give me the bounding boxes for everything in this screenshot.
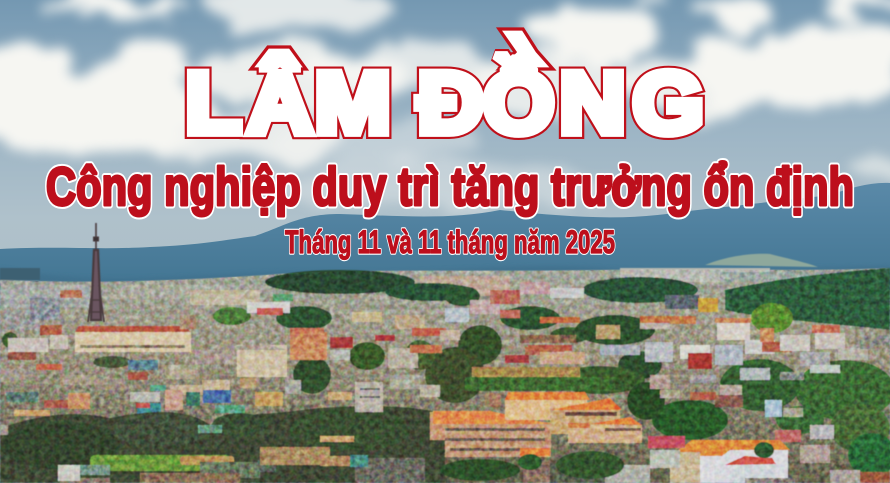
- sky: [0, 0, 890, 290]
- title: LÂM ĐỒNG: LÂMĐỒNG: [185, 54, 704, 151]
- city: [0, 268, 890, 483]
- mountains: [0, 183, 890, 300]
- forest: [2, 268, 890, 477]
- pale distant houses: [0, 268, 840, 307]
- accents outline: [251, 29, 553, 69]
- clouds: [0, 0, 890, 209]
- date line: Tháng 11 và 11 tháng năm 2025: [285, 224, 615, 260]
- school buildings: [433, 392, 650, 483]
- small scattered houses: [0, 282, 890, 483]
- white houses bottom: [440, 436, 795, 483]
- date line: Tháng 11 và 11 tháng năm 2025: [285, 224, 615, 260]
- TV tower: [88, 223, 104, 322]
- colonial long building: [75, 326, 191, 352]
- green band and wall: [465, 377, 615, 391]
- mid-city buildings: [40, 294, 751, 412]
- city texture: [0, 265, 890, 483]
- date line: [285, 224, 615, 260]
- lower left trees: [0, 406, 445, 483]
- title: LÂM ĐỒNG: LÂMĐỒNG: [185, 54, 704, 151]
